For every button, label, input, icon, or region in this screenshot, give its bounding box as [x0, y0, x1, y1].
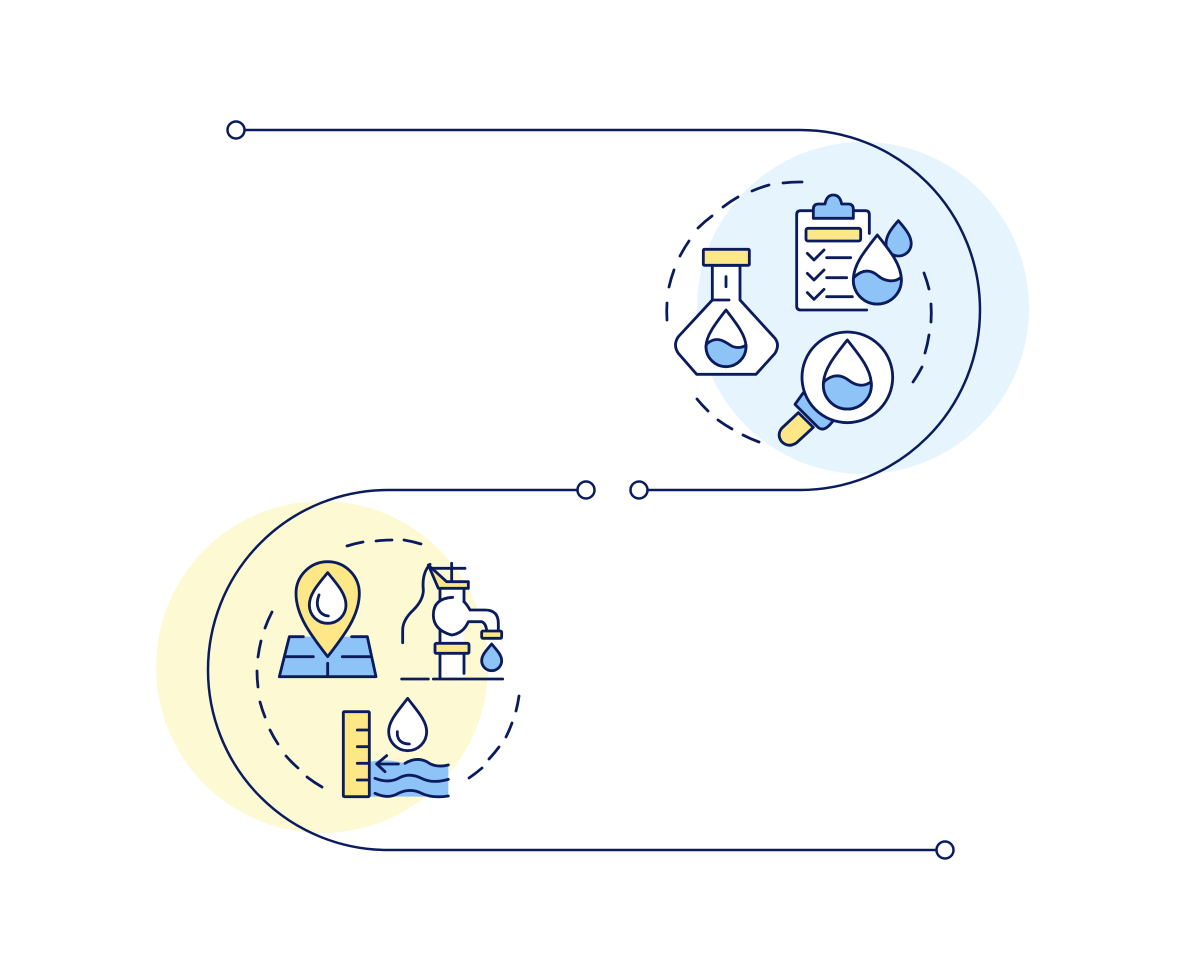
background circle: blue: [697, 142, 1029, 474]
icon: water pump: [402, 563, 503, 679]
background circle: yellow: [156, 501, 488, 833]
top icon group: [675, 195, 911, 445]
connector line: bottom step: [208, 482, 954, 858]
icon: map with location pin: [279, 562, 376, 677]
icon: flask: [675, 249, 777, 374]
connector line: top step: [228, 122, 980, 498]
icon: magnifier with water drop: [779, 332, 893, 445]
bottom icon group: [279, 562, 503, 797]
dashed ring: top: [667, 182, 931, 442]
dashed ring: bottom: [257, 540, 519, 787]
icon: ruler and water level: [343, 698, 448, 797]
icon: clipboard with water drops: [797, 195, 911, 310]
